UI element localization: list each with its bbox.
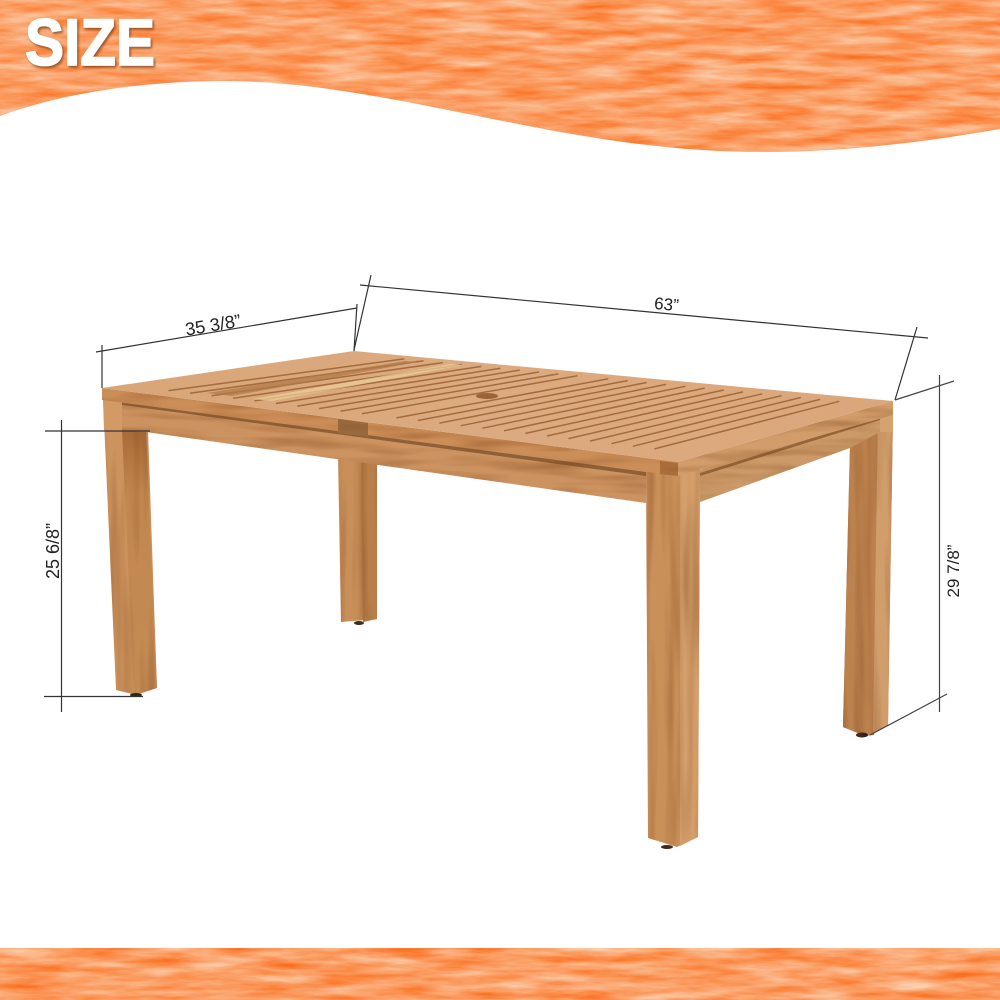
table top front edge (102, 388, 893, 476)
bottom orange textured band (0, 948, 1000, 1000)
dimension: length 63: 63” (653, 294, 680, 315)
front apron (122, 398, 646, 503)
right apron (700, 412, 880, 502)
dark and pale slat planks (207, 361, 464, 401)
dimension: height 29 7/8 (870, 375, 963, 735)
left leg (103, 398, 157, 697)
dimension: width 35 3/8: 35 3/8” (184, 311, 242, 340)
table top surface (102, 351, 893, 462)
dimension: length 63 (354, 275, 928, 400)
left leg top post (103, 398, 122, 431)
dimension: leg clearance 25 6/8: 25 6/8” (43, 523, 63, 579)
right leg (843, 413, 893, 738)
back middle leg (338, 455, 377, 625)
umbrella hole (476, 393, 498, 399)
title: SIZE (25, 5, 155, 79)
dimension: width 35 3/8 (96, 304, 357, 388)
front leg (646, 468, 700, 849)
dimension: height 29 7/8: 29 7/8” (944, 544, 963, 597)
top orange textured banner (0, 0, 1000, 170)
right leg top post (880, 412, 893, 432)
table top slats (168, 359, 839, 449)
teak table (102, 351, 893, 849)
